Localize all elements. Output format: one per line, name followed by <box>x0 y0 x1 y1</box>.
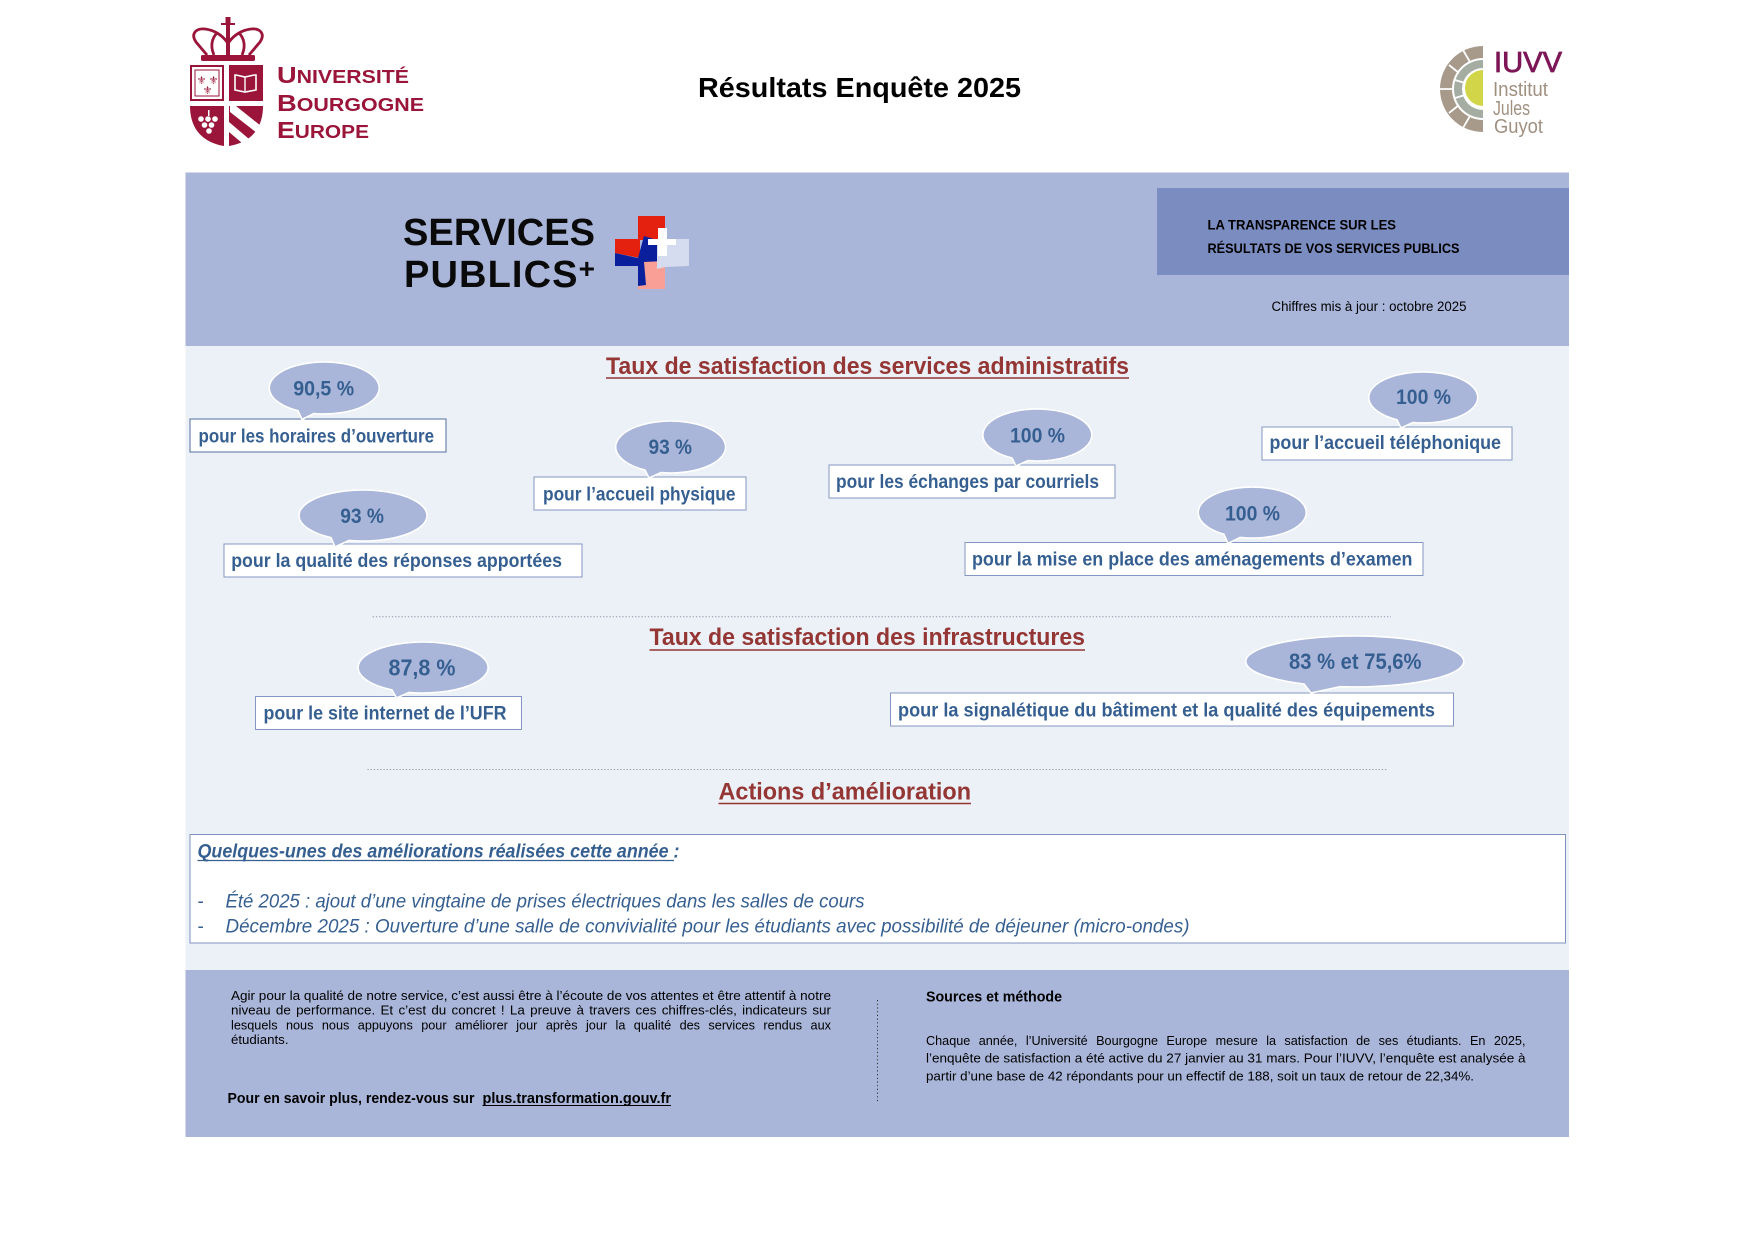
logo: Services Publics+ wordmark: SERVICES <box>403 212 595 254</box>
logo: Université Bourgogne Europe <box>190 17 424 146</box>
heading: sources et méthode: Sources et méthode <box>926 990 1062 1006</box>
stat: signalétique et équipements <box>890 636 1464 726</box>
stat: site internet <box>256 642 522 730</box>
text block: lien en savoir plus <box>228 1091 671 1107</box>
stat: accueil physique <box>534 421 746 510</box>
text block: engagement qualité: niveau de performance. Et c’est du concret ! La preuve à travers ces chiffres-clés, indicateurs sur <box>231 1003 832 1018</box>
update date: Chiffres mis à jour : octobre 2025 <box>1272 299 1466 314</box>
icon: shield top-left fleurs-de-lis: ⚜ <box>203 85 212 97</box>
logo: Services Publics+ wordmark: PUBLICS <box>404 254 578 296</box>
text block: engagement qualité: lesquels nous nous appuyons pour améliorer jour après jour la qualité des services rendus aux <box>231 1017 831 1032</box>
callout: transparency banner: LA TRANSPARENCE SUR LES <box>1208 216 1396 232</box>
stat: aménagements d'examen: 100 % <box>1225 502 1280 526</box>
logo: Services Publics+ wordmark: + <box>579 253 595 284</box>
icon: half sun rings <box>1440 46 1483 132</box>
Institut Jules Guyot wordmark: Guyot <box>1494 116 1543 138</box>
stat: qualité des réponses <box>224 490 582 577</box>
icon: shield top-left fleurs-de-lis: ⚜ <box>197 75 206 87</box>
panel: header band <box>186 172 1569 346</box>
university wordmark: BOURGOGNE <box>277 90 424 116</box>
improvement item: décembre 2025: - <box>198 917 204 938</box>
icon: shield top-left fleurs-de-lis: ⚜ <box>209 75 218 87</box>
text block: méthode: partir d’une base de 42 répondants pour un effectif de 188, soit un taux de retour de 22,34%. <box>926 1069 1474 1084</box>
improvement item: décembre 2025: Décembre 2025 : Ouverture d’une salle de convivialité pour les étudiants avec possibilité de déjeuner (micro-ondes) <box>226 917 1190 938</box>
logo: Services Publics+ wordmark <box>403 212 595 296</box>
Institut Jules Guyot wordmark: Institut <box>1493 79 1548 101</box>
logo: IUVV Institut Jules Guyot <box>1440 46 1563 138</box>
improvement item: été 2025: - <box>198 892 204 913</box>
stat: signalétique et équipements: 83 % et 75,6% <box>1289 649 1422 674</box>
text block: lien en savoir plus: Pour en savoir plus, rendez-vous sur <box>228 1091 475 1107</box>
stat: accueil téléphonique <box>1262 372 1512 460</box>
IUVV wordmark: IUVV <box>1494 47 1563 79</box>
stat: horaires d'ouverture: 90,5 % <box>293 378 354 401</box>
text block: lien en savoir plus: plus.transformation.gouv.fr <box>482 1091 671 1107</box>
Institut Jules Guyot wordmark <box>1493 79 1548 138</box>
stat: accueil téléphonique: 100 % <box>1396 386 1451 409</box>
text block: engagement qualité: Agir pour la qualité de notre service, c’est aussi être à l’écoute de vos attentes et être attentif à notre <box>231 988 831 1003</box>
icon: shield bottom-left grapes <box>190 106 224 146</box>
stat: accueil physique: pour l’accueil physique <box>543 484 736 506</box>
panel: améliorations réalisées <box>190 834 1566 943</box>
stat: signalétique et équipements: pour la signalétique du bâtiment et la qualité des équipements <box>898 700 1435 722</box>
text block: méthode: l’enquête de satisfaction a été active du 27 janvier au 31 mars. Pour l’IUVV, l’enquête est analysée à <box>926 1051 1526 1066</box>
stat: accueil téléphonique: pour l’accueil téléphonique <box>1270 432 1501 454</box>
improvements subheading: Quelques-unes des améliorations réalisées cette année : <box>198 841 680 863</box>
stat: aménagements d'examen: pour la mise en place des aménagements d’examen <box>972 548 1412 570</box>
improvement item: été 2025: Été 2025 : ajout d’une vingtaine de prises électriques dans les salles de cours <box>226 892 865 913</box>
stat: aménagements d'examen <box>965 487 1423 576</box>
panel: main light background <box>186 172 1569 1137</box>
stat: accueil physique: 93 % <box>648 436 692 459</box>
icon: Services Publics cross <box>615 216 689 289</box>
text block: méthode <box>926 1033 1526 1084</box>
icon: shield top-left fleurs-de-lis <box>190 65 224 101</box>
stat: échanges par courriels: 100 % <box>1010 425 1065 448</box>
stat: qualité des réponses: 93 % <box>340 505 384 528</box>
university wordmark: EUROPE <box>277 117 369 143</box>
stat: qualité des réponses: pour la qualité des réponses apportées <box>231 550 562 572</box>
university wordmark: UNIVERSITÉ <box>277 62 409 88</box>
callout: transparency banner <box>1157 188 1569 275</box>
heading: infrastructures: Taux de satisfaction des infrastructures <box>650 624 1085 651</box>
text block: engagement qualité: étudiants. <box>231 1032 288 1047</box>
panel: footer band <box>186 970 1569 1137</box>
stat: horaires d'ouverture: pour les horaires d’ouverture <box>198 426 434 448</box>
stat: horaires d'ouverture <box>190 362 446 452</box>
icon: shield bottom-right stripes <box>229 106 263 146</box>
Institut Jules Guyot wordmark: Jules <box>1493 98 1530 120</box>
text block: engagement qualité <box>231 988 832 1047</box>
heading: actions d'amélioration: Actions d’amélioration <box>718 778 971 806</box>
university wordmark <box>277 62 424 143</box>
stat: site internet: 87,8 % <box>388 654 456 680</box>
icon: crown <box>194 17 262 61</box>
text block: méthode: Chaque année, l’Université Bourgogne Europe mesure la satisfaction de ses étudiants. En 2025, <box>926 1033 1526 1048</box>
title: Résultats Enquête 2025 <box>698 72 1021 103</box>
stat: site internet: pour le site internet de l’UFR <box>264 702 506 724</box>
stat: échanges par courriels: pour les échanges par courriels <box>836 471 1099 493</box>
icon: shield top-right open book <box>229 65 263 101</box>
heading: services administratifs: Taux de satisfaction des services administratifs <box>606 353 1129 380</box>
stat: échanges par courriels <box>829 409 1115 498</box>
callout: transparency banner: RÉSULTATS DE VOS SERVICES PUBLICS <box>1208 240 1460 256</box>
